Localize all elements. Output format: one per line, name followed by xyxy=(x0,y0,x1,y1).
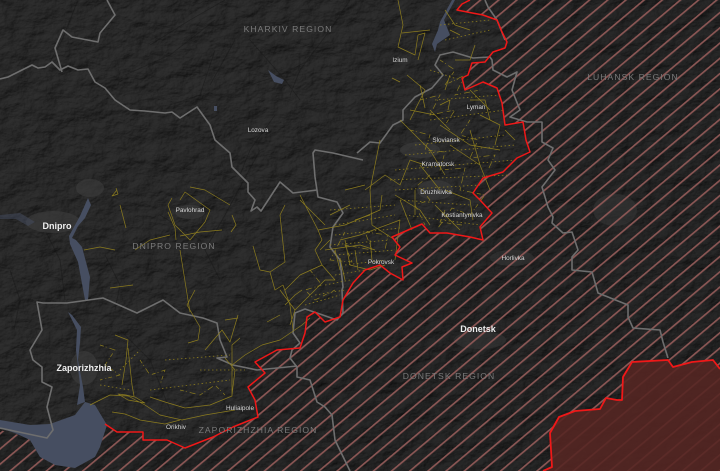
city labels: Dnipro xyxy=(42,221,72,231)
city labels: Horlivka xyxy=(501,255,525,262)
city labels: Huliaipole xyxy=(226,405,254,412)
region labels: DNIPRO REGION xyxy=(132,241,216,251)
city labels: Pokrovsk xyxy=(368,259,395,266)
city labels: Lozova xyxy=(248,127,269,134)
city labels: Lyman xyxy=(467,104,486,111)
region labels: KHARKIV REGION xyxy=(244,24,332,34)
fortification lines xyxy=(84,0,515,424)
region labels: LUHANSK REGION xyxy=(587,72,679,82)
city labels: Kramatorsk xyxy=(422,161,455,168)
occupied Crimea-side territory xyxy=(543,360,720,471)
city labels: Sloviansk xyxy=(432,137,460,144)
water: rivers and reservoirs xyxy=(0,0,455,468)
occupied territory border xyxy=(543,360,720,471)
region labels: ZAPORIZHZHIA REGION xyxy=(199,425,317,435)
city labels: Donetsk xyxy=(460,324,497,334)
city labels: Kostiantynivka xyxy=(441,212,483,219)
front line xyxy=(105,0,530,448)
city areas xyxy=(26,142,637,385)
city labels: Pavlohrad xyxy=(176,207,205,214)
region labels xyxy=(132,24,679,435)
city labels: Izium xyxy=(392,57,408,64)
city labels: Orikhiv xyxy=(166,424,187,431)
city labels: Druzhkivka xyxy=(420,189,452,196)
city labels: Zaporizhzhia xyxy=(56,363,112,373)
city labels xyxy=(42,57,525,431)
region labels: DONETSK REGION xyxy=(403,371,495,381)
